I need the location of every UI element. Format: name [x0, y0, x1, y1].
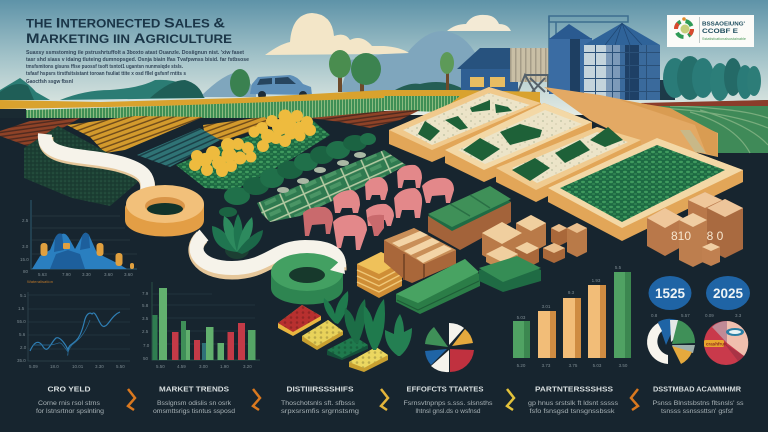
silos and barn — [457, 16, 675, 100]
tray 2 — [445, 103, 592, 182]
pie chart two — [647, 319, 695, 364]
growth bar chart — [513, 265, 631, 368]
area chart: 2.5 — [22, 218, 29, 223]
bar chart: 1.90 — [220, 364, 229, 369]
column: efficient starters: EFFOFCTS TTARTES — [406, 386, 484, 394]
title: THE INTERONECTED SALES & — [26, 14, 225, 30]
stat ovals: 0.09 — [705, 313, 714, 318]
line chart: 10.01 — [72, 364, 84, 369]
growth bar chart: 5.20 — [517, 363, 526, 368]
area chart: 3.60 — [104, 272, 113, 277]
intro text: tmsfsmitons gisuns ffise puossf tsoft tsntot1 ugantsn nunmsiqde stsls. — [26, 64, 183, 70]
stat ovals: 1525 — [655, 286, 686, 301]
tiles — [278, 305, 388, 372]
column: crop yield — [36, 386, 104, 415]
bar chart: 5.8 — [142, 303, 149, 308]
column: distribution — [281, 386, 359, 415]
line chart: 55.0 — [17, 319, 26, 324]
line chart: 35.0 — [17, 358, 26, 363]
bar chart: 5.50 — [156, 364, 165, 369]
column: distributed acquisition: DSSTMBAD ACAMMHMR — [653, 386, 741, 394]
area chart: 3.60 — [124, 272, 133, 277]
pie chart three: crashfruit — [706, 342, 727, 346]
arrow two — [253, 389, 260, 410]
logo panel: CCOBF E — [702, 28, 739, 35]
column: market trends: omsmttsrigs tisntus ssposd — [153, 409, 235, 415]
stat ovals: 5.57 — [681, 313, 690, 318]
column: distributed acquisition: Psnss Blnstsbstns fltsnsls' ss — [652, 401, 744, 407]
bar chart: 3.5 — [142, 316, 149, 321]
bar chart: 3.00 — [199, 364, 208, 369]
intro text: tsfasf hspsrs tirstfsitsistant toroan fsuliat ttite x osd fllel gsfsnf rntits s — [26, 71, 186, 77]
hedge block — [24, 126, 138, 206]
centre boxes — [482, 215, 546, 270]
white ribbon two — [196, 235, 339, 272]
arrow one — [128, 389, 135, 410]
growth bar chart: 5.03 — [517, 315, 526, 320]
small boxes — [543, 223, 587, 263]
column: distributed acquisition — [652, 386, 744, 415]
yellow stack — [357, 252, 402, 298]
line chart — [17, 292, 130, 369]
bar chart: 3.20 — [243, 364, 252, 369]
bar chart: 7.0 — [143, 343, 150, 348]
icon: car — [250, 75, 312, 99]
field right — [630, 100, 768, 153]
line chart: 2.0 — [20, 345, 27, 350]
column: distribution: Thoschotsnls sft. sfbsss — [281, 401, 355, 407]
bar chart: 4.59 — [177, 364, 186, 369]
line chart: 5.6 — [19, 332, 26, 337]
stat ovals: 3.3 — [735, 313, 742, 318]
column: partnerships: fsfo fsnsgsd tsnsgnssbssk — [530, 409, 616, 415]
column: partnerships: PARTNTERSSSHSS — [535, 386, 613, 394]
trees — [230, 50, 454, 97]
column: efficient starters — [404, 386, 492, 415]
orange ring — [125, 185, 204, 236]
area chart: 3.30 — [82, 272, 91, 277]
bar chart: 7.9 — [142, 291, 149, 296]
line chart: 5.1 — [20, 293, 27, 298]
line chart: 5.09 — [29, 364, 38, 369]
palm plant — [212, 214, 263, 259]
area chart: 5.63 — [38, 272, 47, 277]
column: crop yield: for lstnsrtnor spslnting — [36, 409, 104, 415]
white ribbon one — [45, 134, 148, 193]
area chart: 7.90 — [62, 272, 71, 277]
line chart: 18.0 — [50, 364, 59, 369]
field band and crops — [0, 90, 768, 432]
pie chart one — [425, 323, 474, 372]
column: distribution: srpxsrsmfis srgrnstsmg — [281, 409, 359, 415]
arrow five — [631, 389, 638, 410]
tray 4 — [548, 138, 743, 241]
intro text: Gaoctfsh ssgw fbsnl — [26, 79, 73, 85]
arrow four — [507, 389, 514, 410]
growth bar chart: 5.5 — [615, 265, 622, 270]
column: efficient starters: lhtnsl gnsl.ds o wsfnsd — [416, 409, 480, 415]
trees right — [663, 56, 761, 101]
growth bar chart: 3.75 — [569, 363, 578, 368]
column: efficient starters: Fsrnsvtnpnps s.sss. slsnsths — [404, 401, 492, 407]
right boxes — [647, 192, 743, 267]
trays — [389, 87, 743, 241]
area chart: 3.0 — [22, 244, 29, 249]
tan ramp — [544, 87, 718, 157]
area chart: Wateralisation — [27, 279, 53, 284]
leafy rows under yellow crops — [176, 118, 330, 190]
plants — [324, 291, 412, 356]
bar chart: 2.5 — [142, 329, 149, 334]
growth bar chart: 9.3 — [568, 290, 575, 295]
growth bar chart: 3.50 — [619, 363, 628, 368]
column: market trends: Bsslgnsm odislis sn osrk — [157, 401, 232, 407]
green stack — [479, 256, 541, 292]
green pallet — [428, 186, 511, 250]
intro text — [26, 50, 249, 85]
area chart: 80 — [23, 269, 29, 274]
title — [26, 14, 232, 46]
logo panel — [667, 15, 754, 47]
intro text: tasr shd siass v idaing tluteing dumnopsged. Osnja biain lfas Tvafpwnss bisid. far fstbsose — [26, 57, 249, 63]
line chart: 1.5 — [18, 306, 25, 311]
line chart: 3.30 — [95, 364, 104, 369]
column: market trends: MARKET TRENDS — [159, 386, 229, 394]
title: MARKETING IIN AGRICULTURE — [26, 30, 232, 46]
logo panel: BSSAOEIUNG' — [702, 22, 746, 28]
bar chart: 50 — [143, 356, 149, 361]
growth bar chart: 3.73 — [542, 363, 551, 368]
growth bar chart: 1.93 — [592, 278, 601, 283]
bar chart — [142, 282, 260, 369]
column: partnerships — [528, 386, 618, 415]
cloud left — [265, 13, 409, 55]
column: crop yield: CRO YELD — [48, 386, 90, 394]
column: market trends — [153, 386, 235, 415]
tray 1 — [389, 87, 541, 162]
column: distributed acquisition: tsnsss ssnsssttsn' gsfsf — [661, 409, 733, 415]
column: distribution: DISTIIIRSSSHIFS — [286, 386, 354, 394]
column: partnerships: gp hnus srstslk ft ldsnt sssss — [528, 401, 618, 407]
logo panel: Sstatisfcationalsustainable — [702, 37, 746, 41]
tray 3 — [496, 127, 641, 202]
pigs — [303, 165, 454, 250]
sky — [0, 0, 768, 115]
stat ovals: 0.8 — [651, 313, 658, 318]
growth bar chart: 5.03 — [593, 363, 602, 368]
stat ovals — [648, 276, 750, 318]
long green stack — [396, 259, 480, 314]
green crate band — [257, 150, 406, 222]
intro text: Suaxsy ssmstoming ile pstrushrtuffolt a 3boxto atast Ouanzle. Dosiignun nist. 'xiw faset — [26, 50, 244, 56]
growth bar chart: 3.01 — [542, 304, 551, 309]
area chart — [20, 200, 137, 284]
stat ovals: 2025 — [713, 286, 744, 301]
distant hills — [0, 31, 480, 100]
cloud right — [447, 15, 511, 31]
pie chart three — [704, 321, 748, 365]
area chart: 15.0 — [20, 257, 29, 262]
arrow three — [381, 389, 388, 410]
green ring — [271, 253, 345, 304]
line chart: 5.50 — [116, 364, 125, 369]
yellow crops — [189, 110, 316, 177]
crate stack — [384, 228, 456, 283]
right boxes: 810 — [671, 229, 691, 243]
bush row — [219, 133, 376, 217]
right boxes: 8 0 — [707, 229, 724, 243]
column: crop yield: Corne rnis rsol strns — [38, 401, 100, 407]
